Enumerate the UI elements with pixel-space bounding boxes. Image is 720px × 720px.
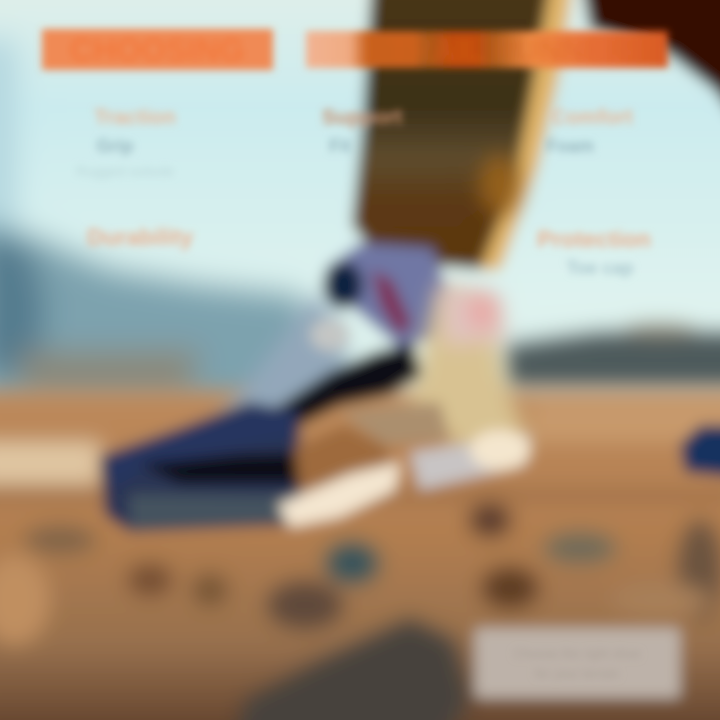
column 2 top: heading and text: Fit bbox=[329, 136, 351, 156]
shoe collar bbox=[325, 243, 452, 348]
title: TRAIL RUNNERS bbox=[390, 32, 650, 68]
right lower heading and text bbox=[537, 226, 651, 278]
dark foreground corner bbox=[580, 0, 720, 135]
trail running shoe bbox=[100, 243, 530, 532]
callout text: Choose the right shoe bbox=[513, 646, 641, 661]
column 2 top: heading and text bbox=[322, 106, 402, 156]
shoe dark band bbox=[270, 342, 422, 425]
column 1 top: heading and text: Traction bbox=[94, 106, 176, 129]
ground rocks and shadows bbox=[0, 504, 720, 720]
shoe midsection bbox=[295, 425, 395, 492]
callout text bbox=[513, 646, 641, 681]
title: CHOOSING bbox=[70, 32, 244, 68]
text overlays bbox=[42, 29, 668, 681]
callout text: for your terrain bbox=[535, 666, 619, 681]
right lower heading and text: Protection bbox=[537, 226, 651, 252]
sky background bbox=[0, 0, 720, 415]
column 1 top: heading and text: Grip bbox=[96, 136, 134, 156]
leg bbox=[352, 0, 574, 270]
column 1 top: heading and text: Rugged outsole bbox=[76, 163, 174, 179]
sandy ground bbox=[0, 390, 720, 720]
right lower heading and text: Toe cap bbox=[567, 258, 633, 278]
left lower heading: Durability bbox=[87, 224, 193, 250]
column 3 top: heading and text bbox=[546, 106, 633, 156]
shoe upper bbox=[215, 295, 345, 425]
distant mountains bbox=[0, 225, 340, 410]
right horizon hills bbox=[505, 324, 720, 388]
shoe heel bbox=[410, 285, 530, 465]
column 3 top: heading and text: Comfort bbox=[551, 106, 633, 129]
column 1 top: heading and text bbox=[76, 106, 176, 179]
column 2 top: heading and text: Support bbox=[322, 106, 402, 129]
shoe sole bbox=[130, 494, 290, 530]
column 3 top: heading and text: Foam bbox=[546, 136, 594, 156]
leg highlight bbox=[480, 0, 574, 270]
callout box bbox=[475, 628, 680, 698]
shoe toe base bbox=[100, 402, 300, 532]
second shoe edge at right bbox=[680, 425, 720, 478]
title bbox=[42, 29, 668, 70]
